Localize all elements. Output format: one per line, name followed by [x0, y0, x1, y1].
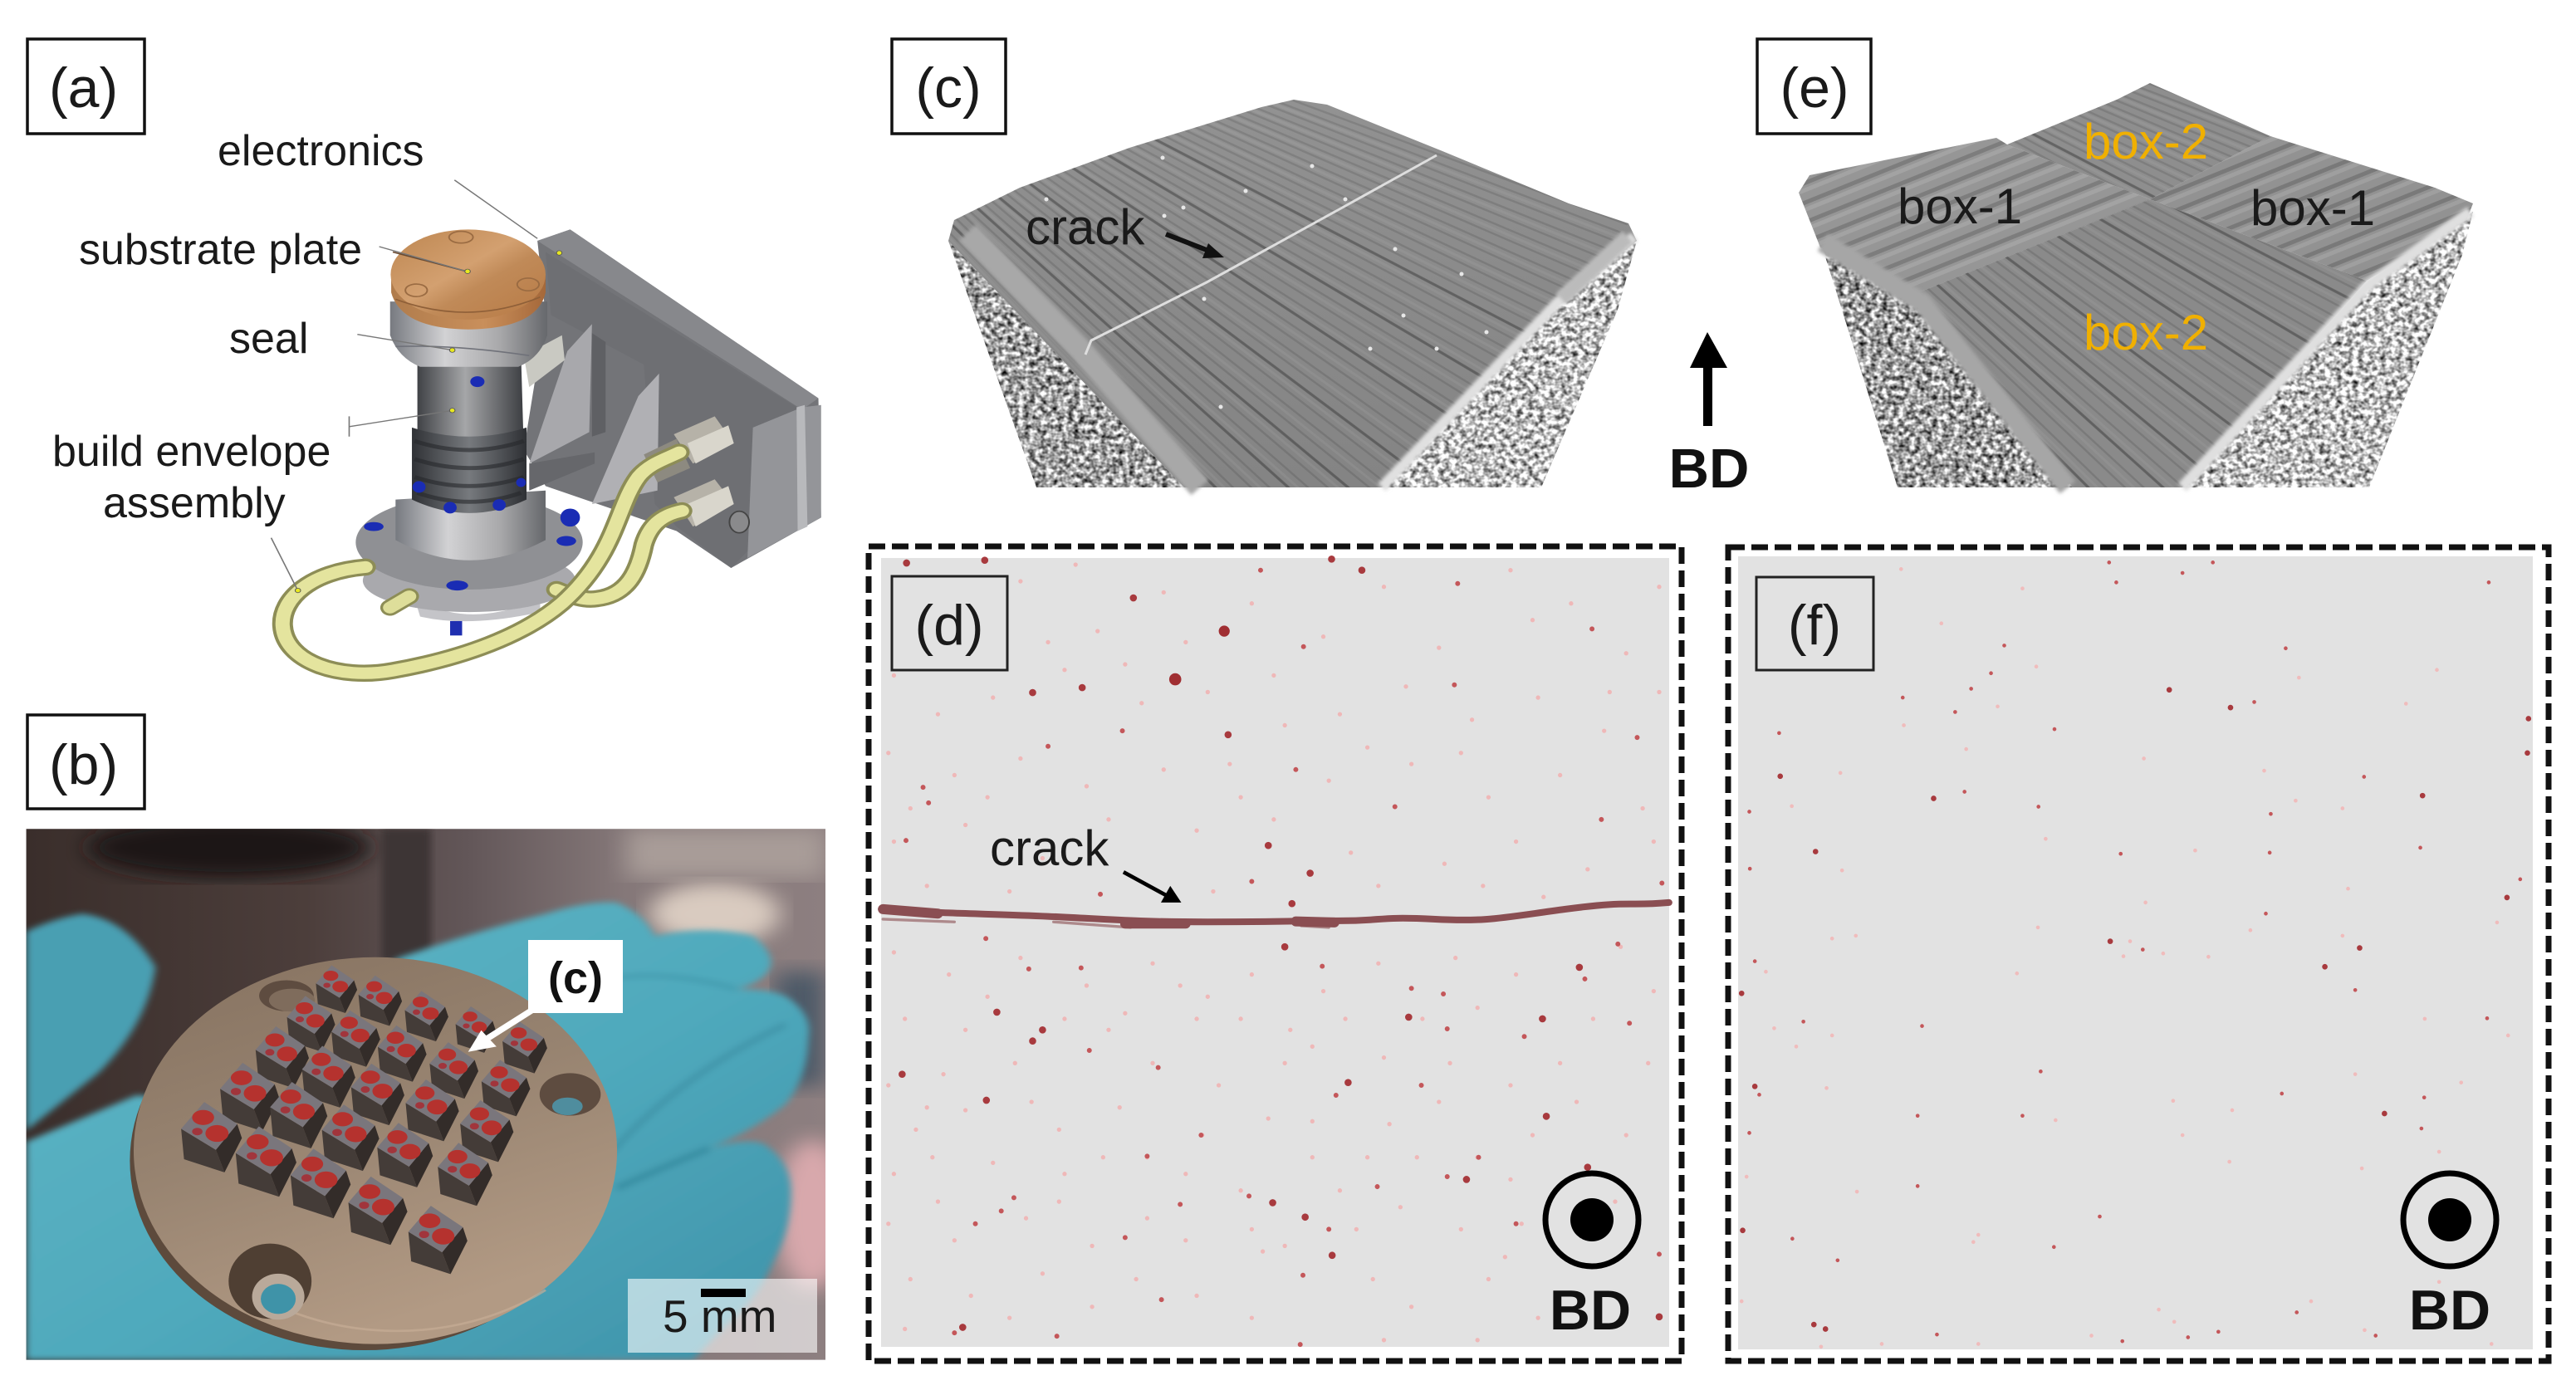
arrow: crack pointer	[1124, 872, 1181, 903]
label: box-2 top: box-2	[2084, 114, 2208, 169]
main crack	[881, 903, 1669, 928]
panel label: (d): (d)	[914, 594, 984, 657]
blurred background	[27, 816, 851, 1360]
label: box-1 left: box-1	[1898, 179, 2022, 234]
machine illustration	[272, 180, 821, 673]
label: build envelope assembly: assembly	[103, 479, 286, 527]
panel: surface topography cracked sample	[551, 0, 2576, 580]
dashed frame	[1728, 547, 2549, 1361]
right side face	[1382, 228, 1637, 487]
panel label: (f): (f)	[1788, 594, 1841, 657]
surface spatter specks	[1046, 158, 1486, 407]
seal ring	[390, 301, 547, 367]
panel: photo of plate on gloved hand	[27, 816, 851, 1360]
callout: (c)	[528, 940, 623, 1013]
fluid tubes	[282, 453, 682, 673]
panel label: (d)	[892, 576, 1007, 670]
arrow: build direction	[1669, 332, 1749, 500]
checkerboard surface	[1799, 83, 2474, 495]
left side face	[948, 241, 1184, 487]
scale bar: 5 mm	[628, 1279, 817, 1353]
glove fingers and palm	[27, 903, 809, 1360]
panel: machine diagram	[52, 127, 821, 673]
label: seal: seal	[229, 315, 308, 363]
base flange	[355, 491, 583, 635]
label: box-2 bottom: box-2	[2084, 305, 2208, 360]
panel: cross-section without crack	[1728, 547, 2549, 1361]
label: crack: crack	[1026, 199, 1145, 255]
mounting holes	[228, 980, 600, 1319]
large pores	[1219, 625, 1230, 637]
label: substrate plate: substrate plate	[79, 226, 362, 274]
crack line on surface	[1085, 155, 1437, 355]
copper substrate plate	[390, 229, 546, 330]
electronics housing	[524, 229, 821, 568]
icon: build direction out of plane	[1545, 1173, 1638, 1342]
label: build envelope assembly: build envelope	[52, 428, 331, 476]
panel: cross-section with crack	[869, 546, 1682, 1361]
arrow: build direction: BD	[1669, 438, 1749, 500]
label: box-1 right: box-1	[2250, 180, 2375, 236]
panel label: (e): (e)	[1780, 56, 1849, 120]
right side face	[2182, 212, 2473, 487]
sparse pores	[1741, 562, 2529, 1347]
top surface	[948, 100, 1638, 497]
panel label: (c)	[892, 39, 1006, 134]
label: crack: crack	[990, 820, 1109, 876]
panel label: (f)	[1756, 577, 1873, 670]
grey section field	[881, 558, 1669, 1347]
scale bar: 5 mm: 5 mm	[663, 1290, 777, 1342]
icon: build direction out of plane: BD	[1550, 1279, 1631, 1342]
icon: build direction out of plane	[2403, 1173, 2496, 1342]
yellow marker dots	[295, 251, 562, 593]
panel label: (c): (c)	[915, 56, 982, 120]
leader lines	[272, 180, 537, 590]
panel label: (b): (b)	[49, 733, 118, 796]
arrow: crack pointer	[1166, 234, 1224, 258]
faint pores	[889, 565, 1659, 1340]
icon: build direction out of plane: BD	[2409, 1279, 2490, 1342]
panel label: (b)	[27, 715, 144, 809]
dashed frame	[869, 546, 1682, 1361]
printed sample cubes	[181, 965, 547, 1274]
white callout arrow	[468, 1009, 533, 1052]
panel label: (a)	[27, 39, 144, 134]
photo scene	[27, 816, 851, 1360]
dark pores	[902, 559, 1659, 1327]
blue fasteners	[364, 376, 580, 590]
bellows	[412, 355, 526, 513]
callout: (c): (c)	[548, 953, 603, 1003]
left side face	[1820, 241, 2073, 487]
medium pores	[906, 570, 1662, 1344]
pores and crack overlay	[881, 559, 1669, 1344]
panel label: (a): (a)	[49, 56, 118, 120]
grey section field	[1738, 556, 2533, 1349]
metal substrate disc	[130, 957, 617, 1350]
cable glands	[644, 416, 749, 533]
panel: surface topography crack-free sample	[1799, 83, 2474, 495]
label: electronics: electronics	[218, 127, 424, 175]
panel label: (e)	[1757, 39, 1871, 134]
